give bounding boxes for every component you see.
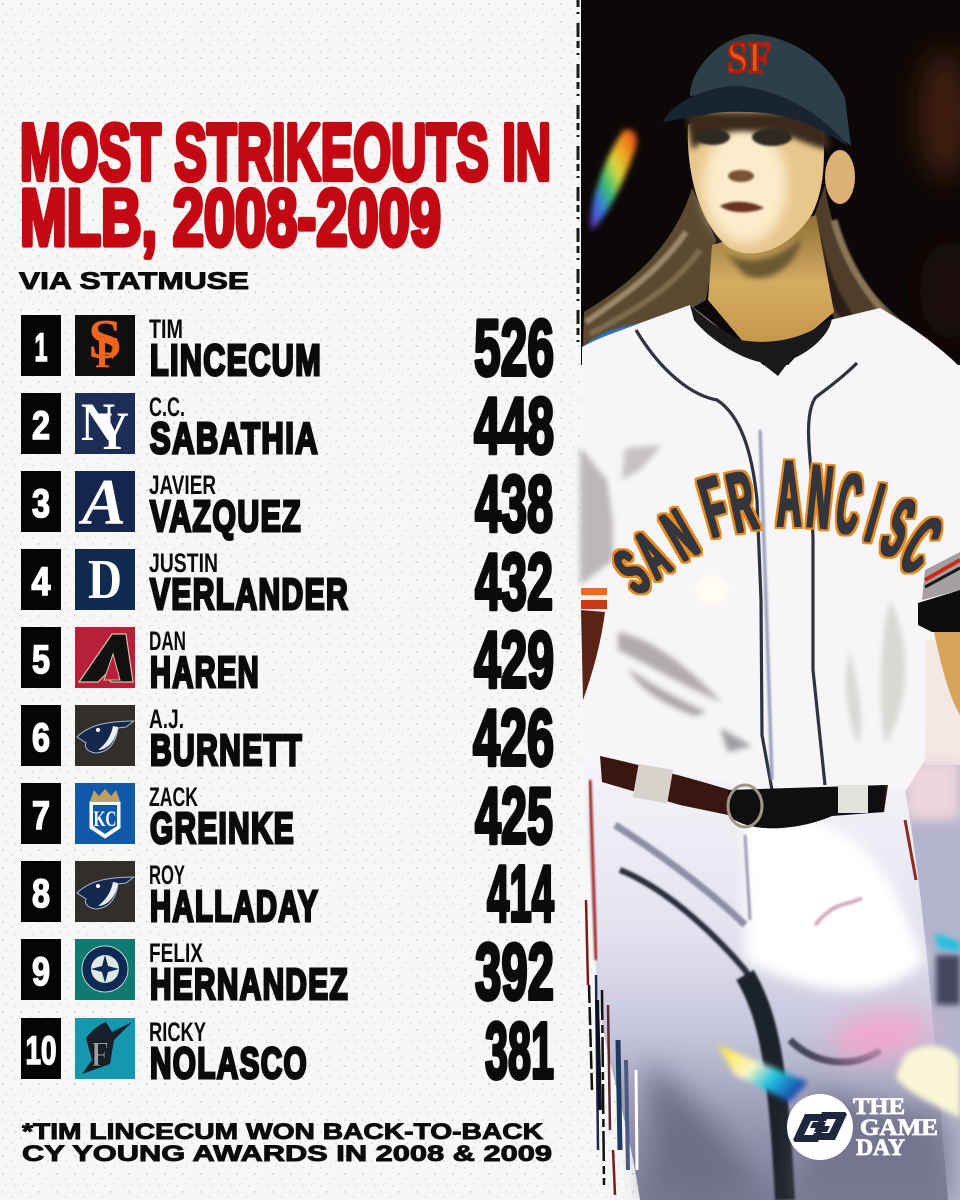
logo: Mariners xyxy=(75,939,135,1000)
row 2: C.C. Sabathia xyxy=(21,381,554,470)
lens flares xyxy=(718,933,960,1118)
footnote: *TIM LINCECUM WON BACK-TO-BACK xyxy=(22,1119,543,1144)
watermark: The Game Day logo xyxy=(787,1094,938,1160)
logo: Braves: A xyxy=(78,466,126,539)
rank 3: 3 xyxy=(32,482,50,526)
strikeouts: 432 xyxy=(475,537,553,626)
rank 8: 8 xyxy=(32,872,50,916)
rank 6 xyxy=(21,705,61,766)
pants folds xyxy=(615,825,880,1200)
jersey script: SAN FRANCISCO: C xyxy=(886,498,956,591)
jersey script: SAN FRANCISCO: A xyxy=(777,441,801,546)
logo: Diamondbacks xyxy=(75,627,135,688)
footnote xyxy=(22,1119,552,1166)
rank 1 xyxy=(21,315,61,376)
logo: Blue Jays xyxy=(75,861,135,922)
strikeouts: 392 xyxy=(475,927,554,1016)
logo: Giants xyxy=(75,309,135,377)
rank 10: 10 xyxy=(26,1029,56,1073)
row 5: Dan Haren xyxy=(21,615,554,704)
rainbow lens flare xyxy=(591,130,637,230)
sleeve cuffs xyxy=(581,588,607,595)
title: MLB, 2008-2009 xyxy=(20,173,441,262)
rank 5 xyxy=(21,627,61,688)
first name: A.J. xyxy=(149,704,184,734)
last name: NOLASCO xyxy=(150,1039,308,1088)
title xyxy=(20,108,551,262)
far side figure on the right xyxy=(905,628,960,1200)
logo: Yankees: N xyxy=(81,392,115,452)
last name: SABATHIA xyxy=(150,414,319,463)
dark stadium backdrop xyxy=(578,0,960,365)
strikeouts: 425 xyxy=(475,771,553,860)
belt with buckle xyxy=(600,756,888,828)
last name: HERNANDEZ xyxy=(150,960,349,1009)
last name: GREINKE xyxy=(150,804,295,853)
logo: Royals xyxy=(75,783,135,844)
rank 6: 6 xyxy=(32,716,50,760)
cap xyxy=(663,33,851,147)
first name: ZACK xyxy=(149,782,198,812)
first name: FELIX xyxy=(149,938,203,968)
jersey script: SAN FRANCISCO: I xyxy=(858,466,892,560)
wordmark xyxy=(853,1094,938,1160)
first name: DAN xyxy=(149,626,186,656)
placket piping xyxy=(636,330,772,790)
source line: VIA STATMUSE xyxy=(19,268,249,295)
logo: Tigers xyxy=(75,549,135,611)
first name: C.C. xyxy=(149,392,185,422)
rank 1: 1 xyxy=(34,326,48,370)
row 3: Javier Vazquez xyxy=(21,459,553,548)
last name: LINCECUM xyxy=(150,336,322,385)
logo: Yankees: Y xyxy=(95,401,129,461)
jersey script: SAN FRANCISCO: N xyxy=(803,447,837,548)
jersey xyxy=(580,305,960,792)
first name: JAVIER xyxy=(149,470,216,500)
jersey script: SAN FRANCISCO: S xyxy=(602,535,662,608)
logo: Marlins: F xyxy=(91,1034,109,1074)
rank 8 xyxy=(21,861,61,922)
jersey script: SAN FRANCISCO: S xyxy=(869,480,927,576)
row 8: Roy Halladay xyxy=(21,849,554,938)
logo: Giants: F xyxy=(95,328,119,377)
first name: JUSTIN xyxy=(149,548,218,578)
last name: HAREN xyxy=(150,648,260,697)
title: MOST STRIKEOUTS IN xyxy=(20,108,551,196)
strikeouts: 429 xyxy=(474,615,554,704)
cap SF logo: SF xyxy=(727,33,771,82)
strikeouts: 448 xyxy=(474,381,554,470)
rank 10 xyxy=(21,1018,61,1079)
jersey script: SAN FRANCISCO: N xyxy=(650,494,710,575)
rank 9: 9 xyxy=(32,950,50,994)
logo: Marlins xyxy=(75,1018,135,1079)
wordmark: GAME xyxy=(860,1115,938,1140)
rank 5: 5 xyxy=(32,638,50,682)
row 10: Ricky Nolasco xyxy=(21,1006,554,1095)
strikeouts: 414 xyxy=(487,849,554,938)
logo: Giants: S xyxy=(88,309,122,371)
last name: HALLADAY xyxy=(150,882,319,931)
footnote: CY YOUNG AWARDS IN 2008 & 2009 xyxy=(22,1141,552,1166)
logo: Yankees xyxy=(75,392,135,461)
pants xyxy=(584,755,948,1200)
logo: Tigers: D xyxy=(88,549,122,611)
jersey script: SAN FRANCISCO: R xyxy=(720,452,764,551)
paint drips at lower left edge xyxy=(586,900,637,1195)
jersey script: SAN FRANCISCO: A xyxy=(622,518,683,594)
rank 7: 7 xyxy=(32,794,50,838)
strikeouts: 426 xyxy=(473,693,554,782)
rank 3 xyxy=(21,471,61,532)
logo: Royals: KC xyxy=(94,806,116,831)
last name: VERLANDER xyxy=(150,570,349,619)
strikeouts: 526 xyxy=(474,303,554,392)
rank 7 xyxy=(21,783,61,844)
face xyxy=(685,106,855,278)
row 4: Justin Verlander xyxy=(21,537,553,626)
rank 2: 2 xyxy=(32,404,50,448)
first name: TIM xyxy=(149,314,183,344)
first name: ROY xyxy=(149,860,185,890)
neck xyxy=(708,215,834,350)
strikeouts: 438 xyxy=(475,459,553,548)
row 7: Zack Greinke xyxy=(21,771,553,860)
photo: Tim Lincecum in Giants uniform xyxy=(578,0,960,1200)
jersey script: SAN FRANCISCO: C xyxy=(830,455,868,553)
rank 4 xyxy=(21,549,61,610)
logo: Blue Jays xyxy=(75,705,135,766)
jersey script: SAN FRANCISCO xyxy=(602,441,956,608)
strikeouts: 381 xyxy=(485,1006,554,1095)
undershirt collar xyxy=(690,305,832,376)
last name: VAZQUEZ xyxy=(150,492,302,541)
logo badge xyxy=(787,1094,853,1160)
wordmark: THE xyxy=(853,1094,905,1119)
row 6: A.J. Burnett xyxy=(21,693,554,782)
leaderboard xyxy=(21,303,554,1095)
rank 4: 4 xyxy=(32,560,51,604)
last name: BURNETT xyxy=(150,726,303,775)
wordmark: DAY xyxy=(856,1135,905,1160)
jersey script: SAN FRANCISCO: F xyxy=(690,458,738,555)
jersey folds xyxy=(580,445,905,752)
jersey light flare xyxy=(695,575,729,605)
rank 9 xyxy=(21,939,61,1000)
row 1: Tim Lincecum xyxy=(21,303,554,392)
rank 2 xyxy=(21,393,61,454)
first name: RICKY xyxy=(149,1017,206,1047)
long hair xyxy=(583,185,932,364)
row 9: Felix Hernandez xyxy=(21,927,554,1016)
